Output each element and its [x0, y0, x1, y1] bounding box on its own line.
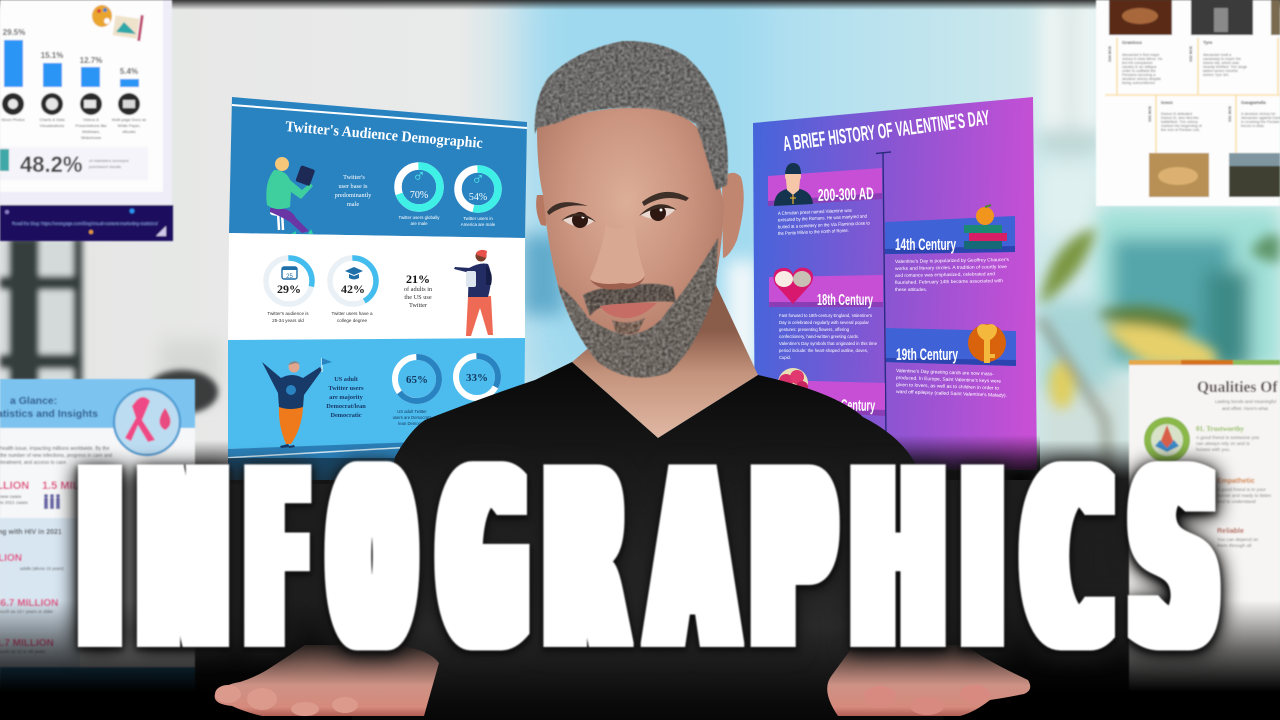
bottom fade to black	[0, 600, 1280, 692]
left hand	[215, 645, 439, 716]
body text and figures: adults (above 15 years)	[20, 566, 64, 571]
bar labels: Webinars,	[82, 129, 100, 134]
text: Democrat majority: are majority	[329, 394, 364, 401]
donut: 29 percent	[266, 258, 312, 304]
text: 18th Century: period include: the heart-shaped outline, doves,	[779, 348, 868, 353]
stat: 21 percent	[404, 272, 433, 309]
text: 14th Century: flourished. February 14th became associated with	[895, 278, 1003, 285]
illustration: person reading tablet	[266, 157, 315, 234]
band: 14th Century	[885, 205, 1015, 254]
timeline text: Alexander built a	[1203, 53, 1232, 57]
title: INFOGRAPHICS: I	[81, 418, 119, 703]
text: 14th Century: these attitudes.	[895, 287, 927, 292]
neck	[572, 285, 758, 438]
timeline text	[1107, 40, 1280, 132]
band: 19th Century: 19th Century	[896, 345, 958, 364]
shirt	[350, 362, 945, 720]
bottom black band	[0, 691, 1280, 720]
body text and figures: health issue, impacting millions worldwide. By the	[0, 446, 110, 452]
timeline text: island city, which was	[1203, 61, 1239, 65]
timeline text: order to outflank the	[1122, 69, 1156, 73]
text: 18th Century	[779, 313, 877, 360]
band: 14th Century: 14th Century	[895, 235, 956, 254]
body text and figures: in 2021 cases	[0, 500, 29, 505]
timeline text: battlefield. The victory	[1161, 120, 1198, 124]
bar labels: Presentations like	[75, 123, 108, 128]
band: 21st Century: 21st Century	[820, 397, 875, 415]
timeline text: 332 BCE	[1188, 45, 1193, 62]
donut: 54 percent: 54%	[469, 192, 487, 203]
item text: can always rely on and is	[1196, 441, 1250, 447]
face	[537, 108, 724, 376]
body text and figures	[0, 446, 113, 654]
donut captions middle row: 25-34 years old	[272, 318, 304, 323]
title: INFOGRAPHICS	[81, 418, 1214, 703]
mustache	[583, 284, 676, 316]
heading: Twitter's Audience Demographic	[285, 119, 484, 152]
text: 18th Century: Valentine's Day symbols that originated in this time	[779, 341, 877, 346]
timeline text: being outnumbered.	[1122, 81, 1156, 85]
text: 18th Century: gestures: presenting flowers, offering	[779, 327, 849, 332]
title: INFOGRAPHICS: G	[445, 418, 521, 703]
donut: 42 percent	[330, 258, 376, 304]
timeline text: Darius III defeated	[1161, 112, 1192, 116]
text: 14th Century: and romance was emphasized, celebrated and	[895, 271, 995, 278]
text: 19th Century	[896, 368, 1007, 398]
panel bottom fade	[750, 435, 1040, 480]
text: 18th Century: Fast forward to 18th-century England, Valentine's	[779, 313, 873, 318]
donut captions middle row	[267, 311, 373, 323]
panel: Twitter audience demographic infographic	[228, 97, 528, 484]
text: 200-300 AD	[778, 208, 870, 236]
band: 200-300 AD	[768, 163, 882, 206]
text: predominantly male	[335, 174, 372, 208]
timeline text: cavalry in an oblique	[1122, 65, 1157, 69]
title: INFOGRAPHICS: O	[335, 418, 409, 703]
title: INFOGRAPHICS: C	[1028, 418, 1107, 703]
bar labels: Visualizations	[40, 123, 64, 128]
timeline text: heavily fortified. The siege	[1203, 65, 1247, 69]
panel bands	[228, 97, 528, 484]
text: 18th Century: Cupid.	[779, 355, 791, 360]
timeline text: 331 BCE	[1227, 105, 1232, 122]
band: 21st Century	[777, 368, 885, 416]
text: predominantly male: user base is	[338, 183, 368, 190]
timeline text: in crushing the Persian	[1241, 120, 1280, 124]
left fingers	[215, 685, 358, 716]
timeline photos	[1109, 0, 1280, 197]
text: 19th Century: given to lovers, as well as to children in order to	[896, 382, 999, 391]
body text and figures: 1.5 MILLION	[42, 480, 106, 492]
panel: top-left bar chart infographic	[0, 0, 173, 241]
heading: A BRIEF HISTORY OF VALENTINE'S DAY	[782, 106, 991, 156]
icon: awareness ribbon badge	[114, 389, 180, 455]
timeline text: marked the beginning of	[1161, 124, 1203, 128]
icon row	[2, 93, 140, 115]
panel: bottom-left health statistics infographic	[0, 379, 195, 697]
timeline axis	[876, 152, 891, 436]
title: INFOGRAPHICS: A	[653, 418, 732, 703]
text: 19th Century: Valentine's Day greeting cards are now mass-	[896, 368, 995, 376]
text: Democrat majority	[326, 376, 366, 419]
donut captions top row: Twitter users globally	[398, 215, 440, 220]
donut caption bottom row: users are Democrats	[393, 415, 431, 420]
band: 18th Century: 18th Century	[817, 292, 873, 309]
bar labels: eBooks	[122, 129, 136, 134]
donut captions middle row: college degree	[337, 318, 368, 323]
timeline text: lasted seven months	[1203, 69, 1238, 73]
band: 19th Century	[886, 324, 1016, 366]
body text and figures: new cases	[0, 494, 22, 499]
icon: palette and painting	[92, 5, 144, 41]
right eyebrow	[642, 192, 689, 206]
donut: 65 percent	[395, 357, 439, 401]
donut: 54 percent: ♂	[471, 169, 485, 189]
item text: A good friend is someone you	[1196, 435, 1260, 441]
stat callout: purchased visuals	[89, 164, 121, 169]
item text: corner and ready to listen	[1217, 493, 1271, 499]
title: INFOGRAPHICS: N	[140, 418, 226, 703]
item text: Empathetic	[1217, 478, 1255, 485]
text: Democrat majority: US adult	[334, 376, 359, 383]
body text and figures: such as 15 to 49 years	[0, 649, 46, 654]
title: INFOGRAPHICS: P	[753, 418, 832, 703]
illustration: person with backpack	[454, 250, 493, 336]
text: 200-300 AD: the Ponte Milvio to the north of Rome.	[778, 228, 849, 236]
footer strip: Read the blog: https://venngage.com/blog/visual-content-marketing-statistics/	[12, 221, 159, 226]
text: 18th Century: confectionery, hand-written greeting cards.	[779, 334, 859, 339]
text: 14th Century: works and literary circles. A tradition of courtly love	[895, 264, 1007, 271]
timeline text: the end of Persian rule.	[1161, 128, 1200, 132]
donut captions top row	[398, 215, 496, 227]
bar labels: Stock Photos	[1, 117, 25, 122]
panel intro: Lasting bonds and meaningful	[1215, 399, 1276, 404]
item text: 01. Trustworthy	[1196, 425, 1244, 433]
panel: bottom-right qualities infographic	[1129, 360, 1280, 700]
bar chart: 29.5%	[3, 28, 25, 37]
text: predominantly male: predominantly	[335, 192, 372, 199]
stat: 21 percent: Twitter	[409, 302, 428, 309]
bar labels: Charts & Data	[39, 117, 65, 122]
stat: 21 percent: 21%	[406, 272, 430, 286]
left eyebrow	[547, 202, 588, 215]
timeline text: forces in Asia.	[1241, 124, 1265, 128]
hair	[535, 41, 728, 190]
donut captions middle row: Twitter users have a	[331, 311, 373, 316]
timeline text: causeway to reach the	[1203, 57, 1241, 61]
bar chart	[3, 28, 139, 87]
donut: 42 percent: 42%	[341, 282, 365, 296]
text: 200-300 AD: buried at a cemetery on the Via Flaminia close to	[778, 220, 870, 229]
panel intro: and effort. Here's what	[1222, 406, 1269, 411]
stat callout	[0, 147, 148, 180]
dark backdrop behind title	[190, 440, 1140, 720]
donut caption bottom row	[393, 409, 431, 426]
title: INFOGRAPHICS: H	[853, 418, 943, 703]
beard	[558, 238, 718, 378]
illustration: person with flag	[262, 358, 332, 448]
right ear	[722, 173, 744, 258]
bar labels: White Paper,	[118, 123, 140, 128]
panel: Valentine's Day history infographic	[750, 97, 1040, 480]
timeline text: Darius III, who fled the	[1161, 116, 1199, 120]
bar labels: Videos &	[83, 117, 99, 122]
title: INFOGRAPHICS: R	[547, 418, 623, 703]
donut: 70 percent	[398, 166, 440, 208]
item text: You can depend on	[1217, 537, 1259, 543]
right fingers	[864, 685, 990, 715]
timeline text: Alexander's first major	[1122, 53, 1160, 57]
panel intro	[1215, 399, 1276, 411]
text: 200-300 AD: A Christian priest named Valentine was	[778, 208, 853, 216]
donut: 33 percent	[456, 356, 498, 398]
text: Democrat majority: Democratic	[330, 412, 362, 419]
timeline text: before Tyre fell.	[1203, 73, 1229, 77]
text: 14th Century: Valentine's Day is popularized by Geoffrey Chaucer's	[895, 257, 1010, 264]
timeline text: Granicus	[1122, 40, 1142, 45]
band: 18th Century	[769, 268, 883, 309]
stat callout: of marketers surveyed	[89, 158, 129, 163]
panel heading: a Glance:	[10, 395, 57, 407]
timeline text: Persians securing a	[1122, 73, 1156, 77]
text: predominantly male: male	[347, 201, 359, 208]
right hand	[827, 645, 1030, 716]
donut: 70 percent: 70%	[410, 190, 428, 201]
color stripe	[1129, 360, 1280, 365]
text: 19th Century: ward off epilepsy (called Saint Valentine's Malady).	[896, 389, 1007, 398]
timeline text: A decisive victory for	[1241, 112, 1276, 116]
item text: A good friend is in your	[1217, 487, 1266, 493]
bar chart: 12.7%	[80, 56, 102, 65]
title: INFOGRAPHICS: S	[1134, 418, 1214, 703]
panel: top-right history timeline	[1096, 0, 1280, 206]
title: INFOGRAPHICS: I	[964, 418, 1001, 703]
text: 14th Century	[895, 257, 1010, 292]
bar labels: Multi-page Docs as	[112, 117, 146, 122]
timeline text: 333 BCE	[1147, 105, 1152, 122]
left ear	[536, 195, 546, 226]
body text and figures: such as 15+ years or older	[0, 609, 54, 614]
stat: 21 percent: of adults in	[404, 286, 433, 293]
stat: 21 percent: the US use	[404, 294, 432, 301]
footer strip	[0, 205, 173, 241]
timeline text: Gaugamela	[1241, 100, 1266, 105]
text: 18th Century: Day is celebrated regularly with several popular	[779, 320, 869, 325]
timeline text: decisive victory despite	[1122, 77, 1161, 81]
mouth	[600, 303, 657, 318]
item text: Reliable	[1217, 528, 1244, 535]
timeline text: Tyre	[1203, 40, 1213, 45]
donut captions top row: America are male	[461, 222, 496, 227]
timeline lines	[1105, 38, 1280, 153]
right eye	[639, 204, 677, 221]
presenter	[350, 41, 945, 720]
donut: 54 percent	[458, 169, 498, 209]
donut captions top row: are male	[410, 221, 428, 226]
donut caption bottom row: lean Democrat	[398, 421, 426, 426]
text: Democrat majority: Democrat/lean	[326, 403, 366, 410]
item text: and to understand	[1217, 499, 1256, 505]
donut: 29 percent: 25	[286, 274, 293, 280]
donut captions middle row: Twitter's audience is	[267, 311, 309, 316]
timeline text: Issus	[1161, 100, 1173, 105]
nose	[590, 220, 645, 289]
body text and figures: the number of new infections, progress in care and	[0, 453, 113, 459]
bar chart: 5.4%	[120, 67, 138, 76]
left eye	[561, 212, 596, 228]
donut: 29 percent: 29%	[277, 282, 301, 296]
timeline text: victory in Asia Minor. He	[1122, 57, 1163, 61]
chin patch	[612, 318, 645, 334]
band: 200-300 AD: 200-300 AD	[817, 184, 874, 205]
panel heading: atistics and Insights	[0, 408, 98, 420]
text: Democrat majority: Twitter users	[328, 385, 364, 392]
item text: honest with you.	[1196, 447, 1231, 453]
panel heading	[0, 395, 98, 420]
item text	[1196, 425, 1271, 549]
donut: 33 percent: 33%	[466, 372, 488, 384]
bar chart: 15.1%	[41, 51, 63, 60]
bar labels: Slideshows	[81, 135, 101, 140]
timeline text: led his companion	[1122, 61, 1153, 65]
title: INFOGRAPHICS: F	[249, 418, 306, 703]
body text and figures: treatment, and access to care.	[0, 460, 67, 466]
icon: trustworthy badge	[1144, 417, 1190, 463]
item text: them through all	[1217, 543, 1251, 549]
text: 19th Century: produced. In Europe, Saint Valentine's keys were	[896, 375, 1001, 384]
timeline text: 334 BCE	[1107, 45, 1112, 62]
donut caption bottom row: US adult Twitter	[397, 409, 427, 414]
donut: 70 percent: ♂	[412, 166, 426, 186]
donut: 65 percent: 65%	[406, 374, 428, 386]
nose shadow	[590, 276, 645, 290]
bar labels	[1, 117, 146, 140]
text: 200-300 AD: executed by the Romans. He was martyred and	[778, 214, 867, 222]
stat callout: 48.2%	[20, 152, 82, 177]
donut captions top row: Twitter users in	[463, 216, 493, 221]
text: predominantly male: Twitter's	[343, 174, 365, 181]
